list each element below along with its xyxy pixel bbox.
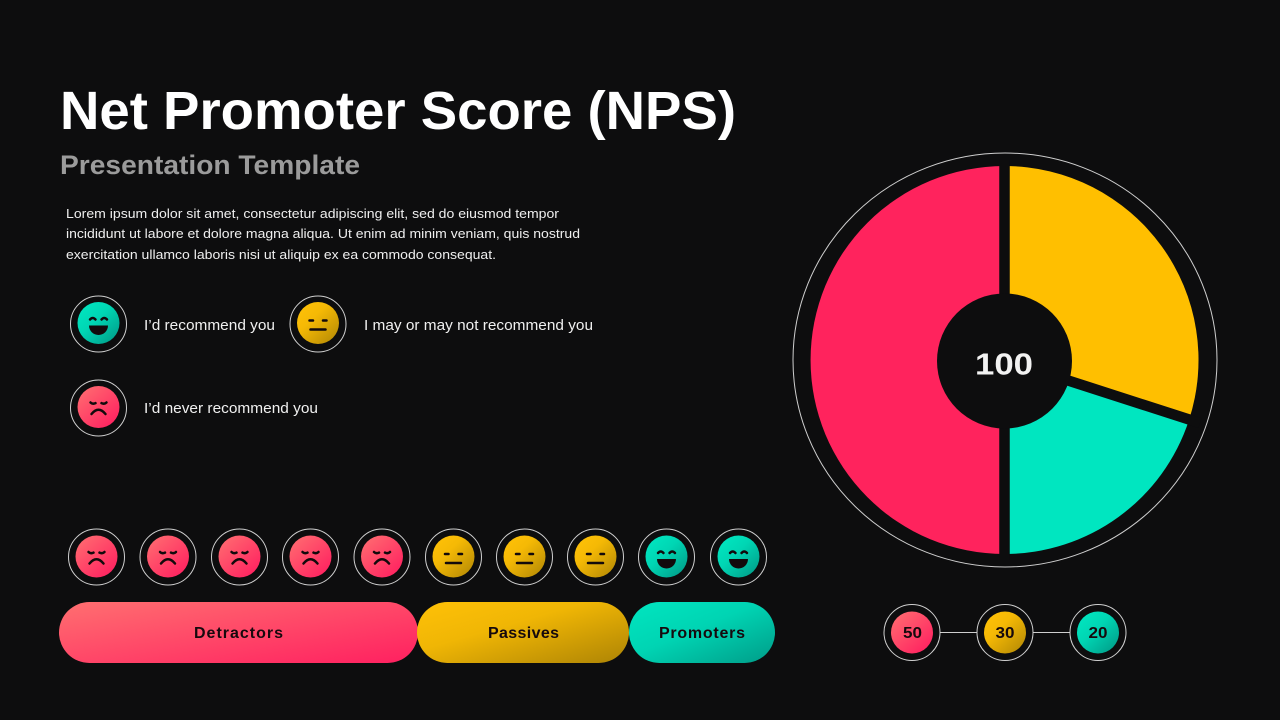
score: 30: 30: [996, 625, 1015, 642]
face: promoter 1: [638, 529, 694, 585]
face: detractor 3: [212, 529, 268, 585]
outer ring: [793, 153, 1217, 567]
bar: passives: Passives: [488, 625, 559, 642]
score: 30: [977, 604, 1033, 660]
score: 20: 20: [1088, 625, 1108, 642]
body text: exercitation ullamco laboris nisi ut aliquip ex ea commodo consequat.: [66, 247, 496, 262]
bar: promoters: Promoters: [659, 625, 745, 642]
legend: promoters: [70, 296, 275, 352]
legend: detractors: I’d never recommend you: [144, 400, 318, 417]
score: 50: 50: [903, 625, 922, 642]
face: passive 2: [496, 529, 552, 585]
bar: promoters: [629, 602, 775, 663]
row of rating faces: [68, 529, 766, 585]
legend: passives: [290, 296, 593, 352]
slice: promoters 20: [1004, 360, 1189, 554]
bar: detractors: [59, 602, 418, 663]
body text: Lorem ipsum dolor sit amet, consectetur adipiscing elit, sed do eiusmod tempor: [66, 206, 560, 221]
body text: [66, 206, 580, 262]
face: detractor 4: [282, 529, 338, 585]
score: 20: [1070, 604, 1126, 660]
subtitle: Presentation Template: [60, 150, 360, 180]
slice: detractors 50: [811, 166, 1004, 554]
centre hole with total: [937, 294, 1072, 428]
title: Net Promoter Score (NPS): [60, 81, 736, 141]
face: detractor 2: [140, 529, 196, 585]
bar: detractors: Detractors: [194, 625, 283, 642]
centre hole with total: 100: [975, 346, 1033, 382]
legend: detractors: [70, 380, 318, 436]
score chain: [884, 604, 1126, 660]
bar: passives: [417, 602, 629, 663]
pie chart: [793, 153, 1217, 567]
face: promoter 2: [710, 529, 766, 585]
body text: incididunt ut labore et dolore magna aliqua. Ut enim ad minim veniam, quis nostrud: [66, 226, 580, 241]
legend: passives: I may or may not recommend you: [364, 317, 593, 334]
legend: promoters: I’d recommend you: [144, 317, 275, 334]
face: passive 1: [426, 529, 482, 585]
face: passive 3: [568, 529, 624, 585]
face: detractor 1: [68, 529, 124, 585]
score: 50: [884, 604, 940, 660]
face: detractor 5: [354, 529, 410, 585]
slice: passives 30: [1004, 166, 1199, 420]
